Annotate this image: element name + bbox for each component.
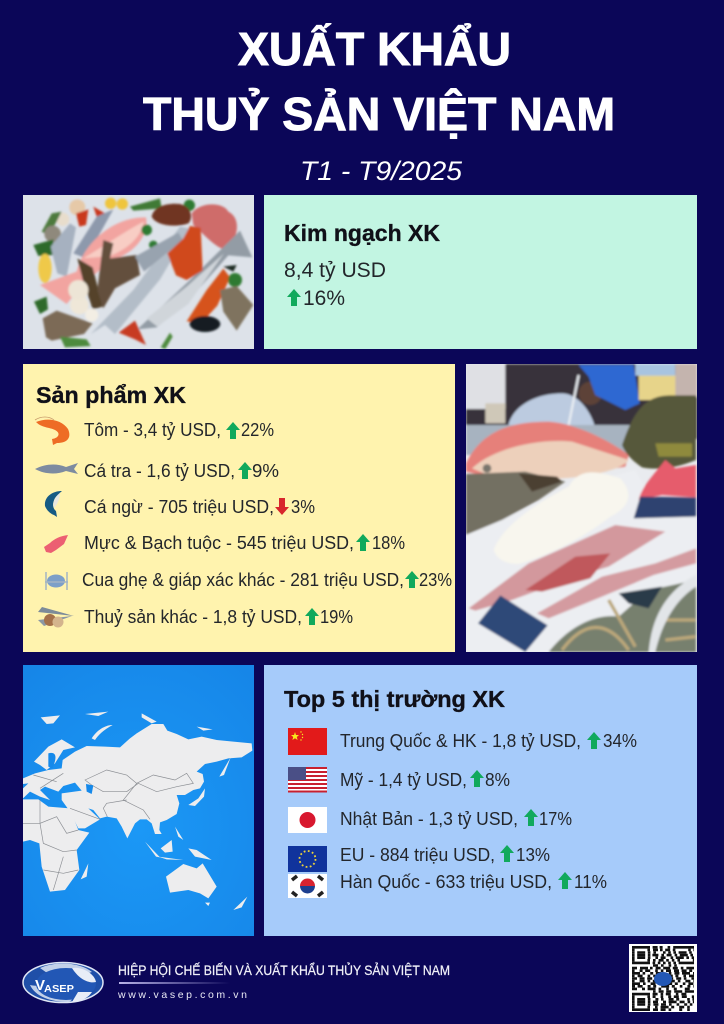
- title: [143, 23, 615, 140]
- footer: website: www.vasep.com.vn: [117, 989, 247, 1001]
- logo: VASEP: V: [35, 977, 45, 994]
- logo: VASEP: [23, 962, 103, 1002]
- flag: China: [288, 728, 327, 755]
- row: United States: 8%: [485, 769, 510, 790]
- row: squid and octopus: 18%: [372, 533, 405, 553]
- flag: United States: [288, 767, 327, 792]
- photo: seafood platter: [23, 195, 254, 349]
- row: shrimp: 22%: [241, 420, 274, 440]
- row: European Union: EU - 884 triệu USD,: [340, 844, 495, 865]
- heading: export value: Kim ngạch XK: [284, 220, 440, 246]
- row: crab and crustaceans: Cua ghẹ & giáp xác khác - 281 triệu USD,: [82, 570, 404, 590]
- footer: association name: [117, 961, 450, 1001]
- row: other seafood: Thuỷ sản khác - 1,8 tỷ USD,: [84, 607, 302, 627]
- icon: other seafood: [38, 607, 74, 628]
- row: tuna: Cá ngừ - 705 triệu USD,: [84, 497, 274, 517]
- map: Asia-Pacific: [23, 665, 254, 936]
- flag: Japan: [288, 807, 327, 833]
- icon: shrimp: [35, 417, 69, 445]
- row: Japan: 17%: [539, 808, 572, 829]
- row: Japan: Nhật Bản - 1,3 tỷ USD,: [340, 808, 518, 829]
- row: crab and crustaceans: 23%: [419, 570, 452, 590]
- icon: crab: [45, 572, 68, 590]
- panel: top 5 markets: [264, 665, 697, 936]
- icon: pangasius: [35, 463, 78, 474]
- logo: VASEP: ASEP: [44, 984, 74, 995]
- panel: export products: [23, 364, 455, 652]
- growth: total export: 16%: [303, 287, 345, 310]
- row: South Korea: Hàn Quốc - 633 triệu USD,: [340, 871, 552, 892]
- row: pangasius: 9%: [252, 461, 279, 481]
- icon: tuna: [45, 491, 62, 517]
- icon: squid: [44, 535, 68, 553]
- title: XUẤT KHẨU: [238, 23, 511, 75]
- footer: association name: HIỆP HỘI CHẾ BIẾN VÀ XUẤT KHẨU THỦY SẢN VIỆT NAM: [118, 961, 450, 978]
- row: tuna: 3%: [291, 497, 315, 517]
- heading: export products: Sản phẩm XK: [36, 382, 186, 408]
- row: pangasius: Cá tra - 1,6 tỷ USD,: [84, 461, 235, 481]
- photo: seafood display: [466, 364, 697, 652]
- row: United States: Mỹ - 1,4 tỷ USD,: [340, 769, 467, 790]
- title: THUỶ SẢN VIỆT NAM: [143, 88, 615, 140]
- row: European Union: 13%: [516, 844, 550, 865]
- flag: South Korea: [288, 874, 327, 898]
- row: China and Hong Kong: Trung Quốc & HK - 1,8 tỷ USD,: [340, 730, 581, 751]
- row: shrimp: Tôm - 3,4 tỷ USD,: [84, 420, 221, 440]
- subtitle: period: T1 - T9/2025: [300, 156, 463, 186]
- row: South Korea: 11%: [574, 871, 607, 892]
- QR code: [629, 944, 697, 1012]
- value: total export: 8,4 tỷ USD: [284, 259, 386, 282]
- flag: European Union: [288, 846, 327, 872]
- heading: top 5 markets: Top 5 thị trường XK: [284, 686, 505, 712]
- row: China and Hong Kong: 34%: [603, 730, 637, 751]
- row: other seafood: 19%: [320, 607, 353, 627]
- panel: export value: [264, 195, 697, 349]
- row: squid and octopus: Mực & Bạch tuộc - 545 triệu USD,: [84, 533, 354, 553]
